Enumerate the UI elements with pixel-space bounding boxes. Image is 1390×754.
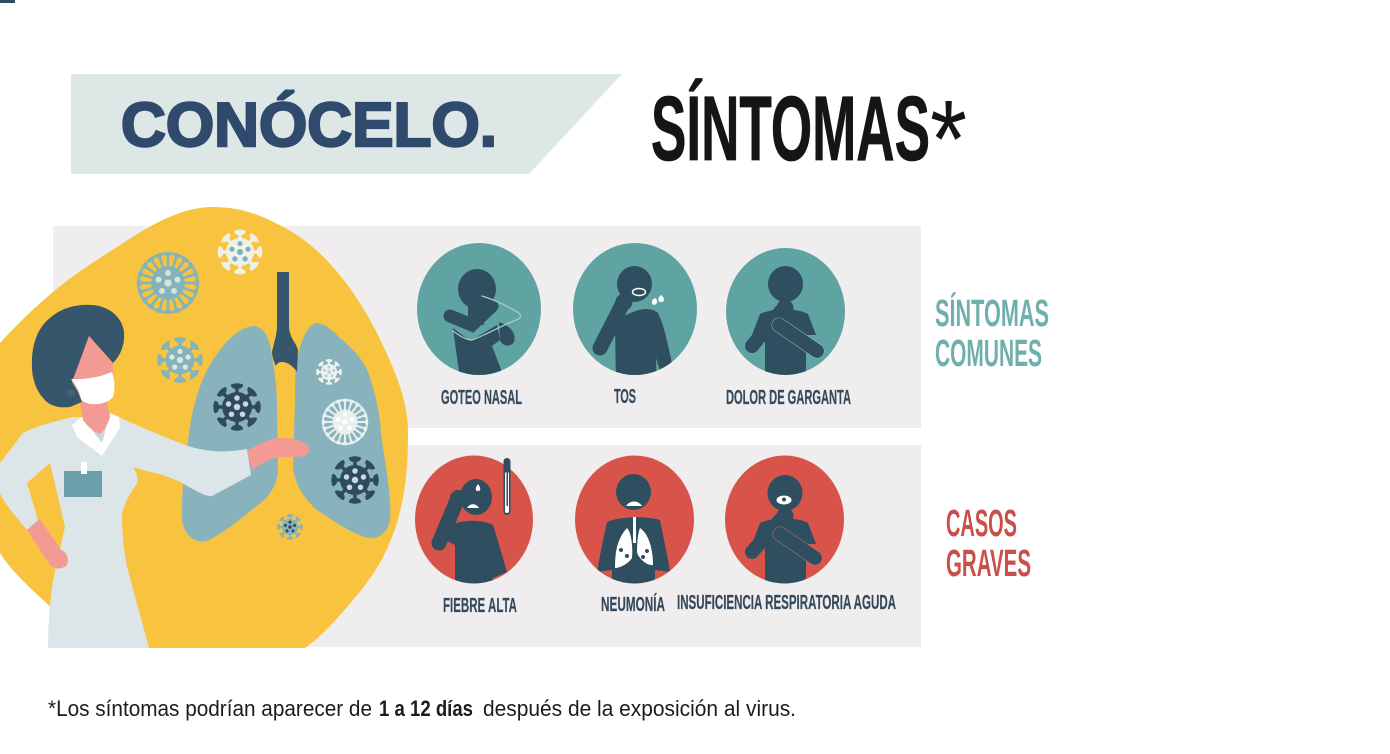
virus 5	[316, 359, 342, 385]
doctor	[0, 305, 309, 648]
footnote	[48, 696, 796, 721]
virus 8	[277, 514, 303, 540]
icon: tos	[573, 243, 697, 385]
heading: casos graves: GRAVES	[946, 543, 1031, 585]
icon: goteo nasal	[417, 243, 541, 380]
footnote: 1 a 12 días	[379, 696, 473, 721]
virus 1	[137, 252, 199, 314]
badge	[64, 471, 102, 497]
label: goteo nasal: GOTEO NASAL	[441, 387, 522, 409]
banner: CONÓCELO: CONÓCELO.	[121, 91, 497, 160]
label: tos: TOS	[614, 386, 636, 408]
banner: CONÓCELO	[71, 74, 622, 174]
thermometer	[504, 458, 510, 515]
illustration: doctor and lungs	[0, 207, 408, 648]
virus 2	[218, 230, 262, 274]
label: dolor de garganta: DOLOR DE GARGANTA	[726, 387, 851, 409]
icon: dolor de garganta	[726, 248, 845, 378]
yellow blob	[0, 207, 408, 648]
heading: síntomas comunes	[935, 291, 1049, 375]
left lung	[182, 326, 278, 542]
heading: casos graves: CASOS	[946, 503, 1017, 545]
title: SÍNTOMAS	[651, 77, 967, 201]
virus 4	[213, 383, 261, 431]
icon: insuficiencia respiratoria aguda	[725, 456, 844, 587]
panel: casos graves background	[53, 445, 921, 647]
virus 7	[331, 456, 379, 504]
title: SÍNTOMAS: *	[930, 78, 967, 201]
label: neumonía: NEUMONÍA	[601, 593, 665, 616]
panel: síntomas comunes background	[53, 226, 921, 428]
icon: fiebre alta	[415, 456, 533, 590]
title: SÍNTOMAS: SÍNTOMAS	[651, 77, 930, 180]
footnote: *Los síntomas podrían aparecer de	[48, 696, 372, 721]
label: insuficiencia respiratoria aguda: INSUFICIENCIA RESPIRATORIA AGUDA	[677, 592, 896, 614]
heading: síntomas comunes: COMUNES	[935, 333, 1042, 375]
icon: neumonía	[575, 456, 694, 590]
heading: síntomas comunes: SÍNTOMAS	[935, 291, 1049, 335]
virus 3	[157, 337, 203, 383]
label: fiebre alta: FIEBRE ALTA	[443, 595, 517, 617]
virus 6	[322, 399, 368, 445]
footnote: después de la exposición al virus.	[483, 696, 796, 721]
heading: casos graves	[946, 503, 1031, 585]
trachea	[272, 272, 298, 372]
right lung	[293, 323, 390, 538]
